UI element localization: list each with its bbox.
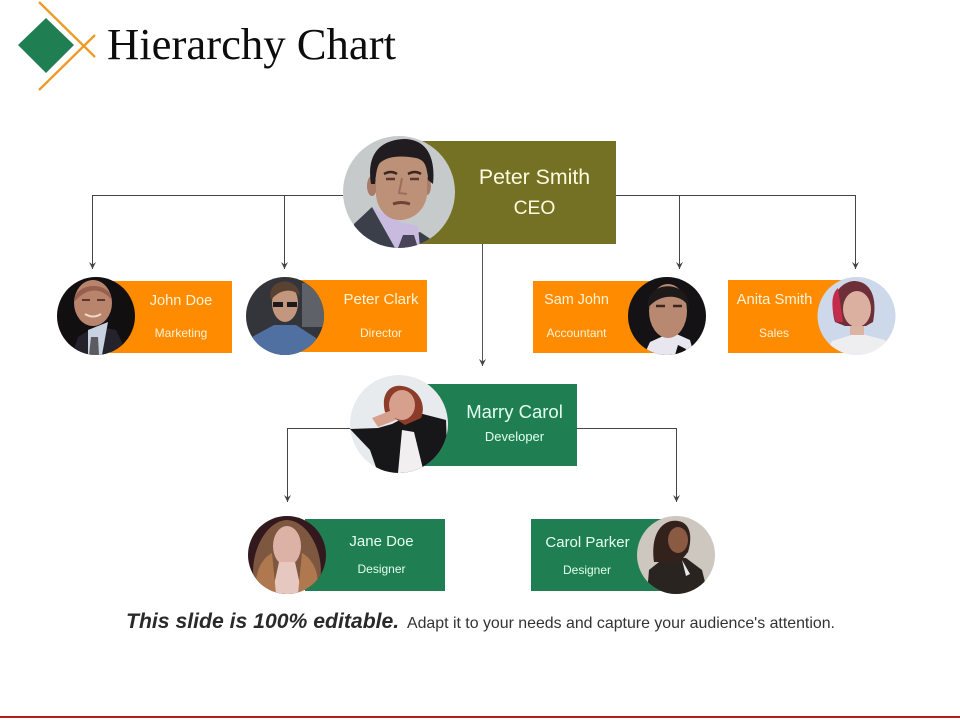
role: Developer [485,429,545,444]
card: John Doe [57,277,232,355]
role: Sales [759,326,789,340]
portrait: Peter Clark [246,277,324,355]
card: Anita Smith [728,277,896,355]
caption: Adapt it to your needs and capture your audience's attention. [407,615,835,632]
bottom rule [0,716,960,718]
card background [410,141,616,244]
card background [533,281,655,353]
name: Jane Doe [349,533,414,550]
card: Peter Smith [343,136,616,248]
name: Marry Carol [466,401,563,422]
role: Accountant [546,326,607,340]
title: Hierarchy Chart [107,20,396,69]
card background [300,280,427,352]
card: Sam John [533,277,706,355]
card: Peter Clark [246,277,427,355]
connector arrow: CEO to developer [482,244,484,366]
role: CEO [514,198,555,219]
card background [728,280,850,353]
logo icon: green diamond with orange chevron [18,2,95,90]
card background [305,519,445,591]
role: Director [360,326,402,340]
name: Carol Parker [545,534,630,551]
name: Peter Clark [343,291,419,308]
card background [110,281,232,353]
portrait: John Doe [57,277,135,355]
connector arrows: developer to designers [288,428,676,502]
name: Anita Smith [737,292,812,308]
portrait: Carol Parker [637,516,715,594]
card background [531,519,661,591]
name: John Doe [150,293,212,309]
caption: This slide is 100% editable. [126,610,399,633]
connector arrows: CEO to four managers [92,196,856,269]
card: Carol Parker [531,516,715,594]
role: Designer [357,562,406,576]
role: Designer [563,563,611,577]
name: Peter Smith [479,165,590,189]
name: Sam John [544,292,609,308]
card background [420,384,577,466]
card: Marry Carol [350,375,577,473]
portrait: Marry Carol [350,375,448,473]
role: Marketing [155,326,207,340]
portrait: Sam John [628,277,706,355]
portrait: Peter Smith [343,136,455,248]
portrait: Anita Smith [817,277,896,355]
card: Jane Doe [248,516,445,594]
portrait: Jane Doe [248,516,326,594]
